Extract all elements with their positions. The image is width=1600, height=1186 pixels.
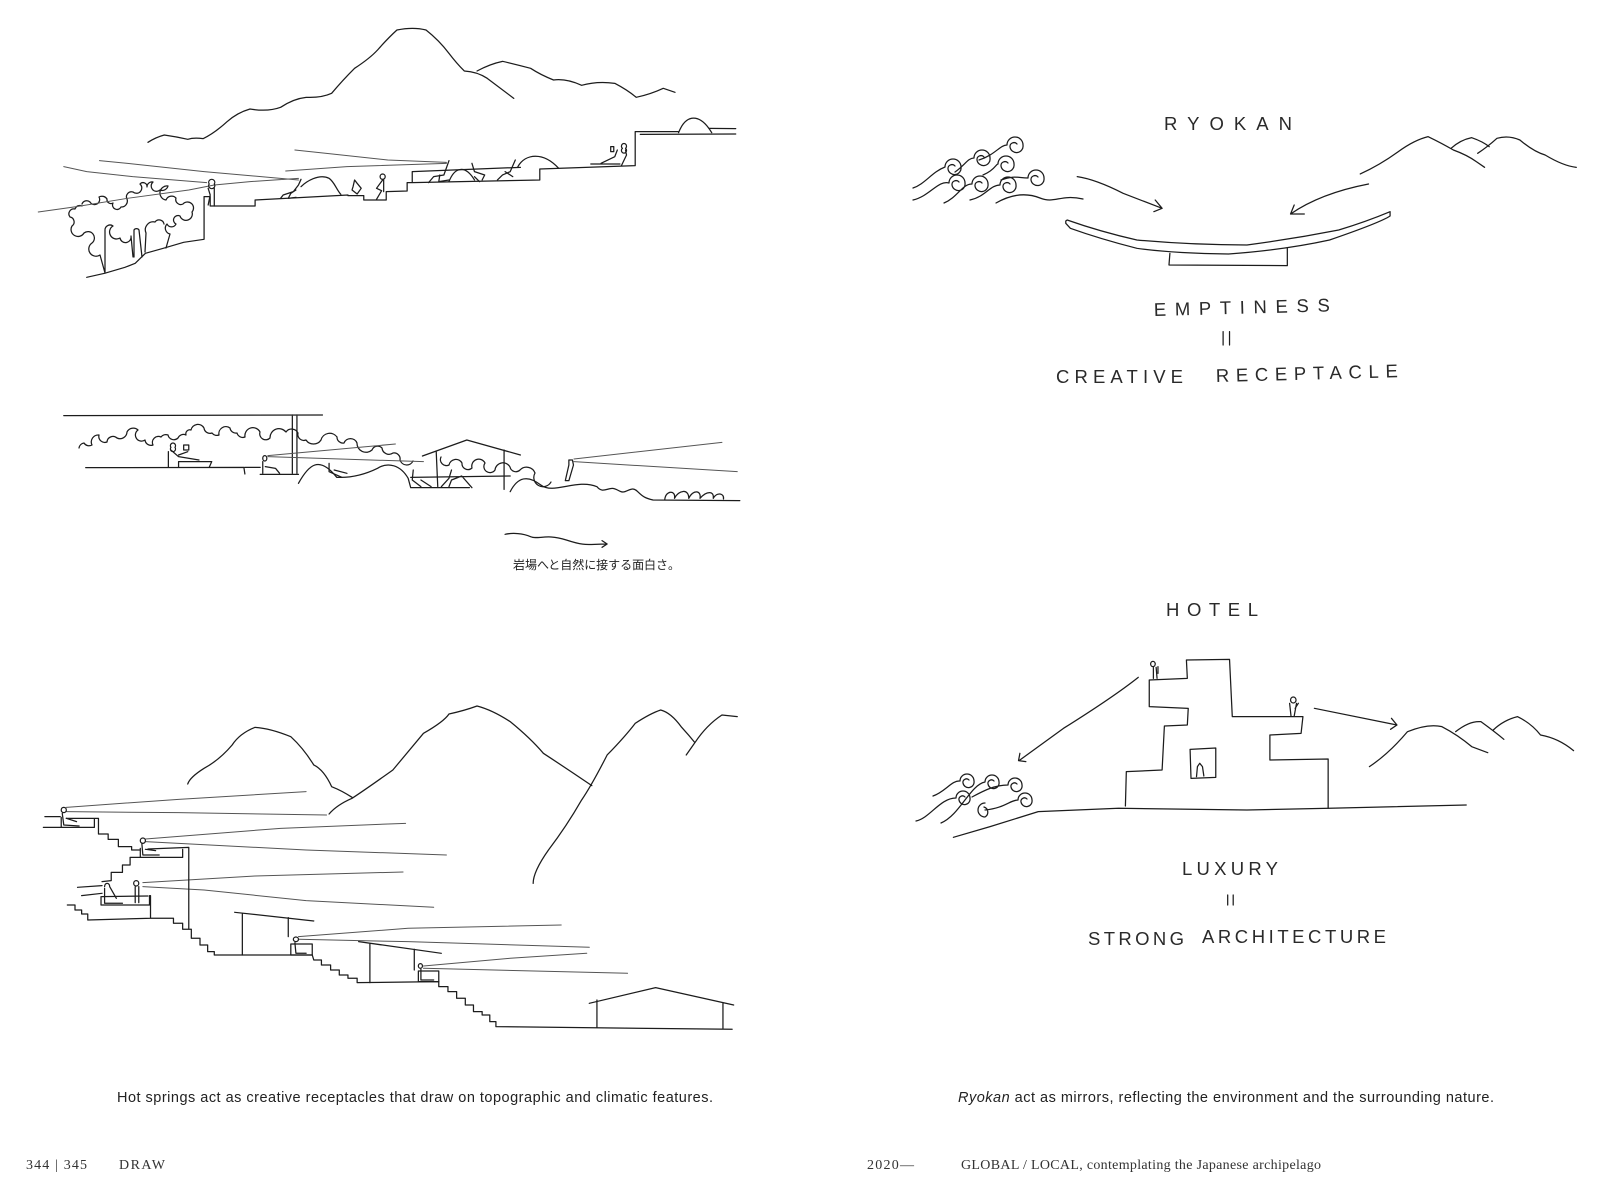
handwritten label: luxury: LUXURY — [1182, 858, 1278, 879]
stacked building outline — [1125, 659, 1328, 808]
bathers and reader figures — [168, 443, 573, 487]
viewing sight lines — [38, 150, 446, 212]
folio: page numbers: 344 | 345 — [26, 1158, 87, 1173]
window with figure — [1190, 748, 1216, 778]
arrow to sea — [1019, 677, 1138, 762]
arrow from mountains — [1291, 184, 1369, 214]
folio: year: 2020— — [867, 1158, 915, 1173]
sight lines — [66, 792, 628, 973]
drawing group in zoom units — [38, 28, 736, 277]
rooftop figures — [1151, 661, 1298, 716]
waves with spiral curls — [916, 774, 1032, 823]
equals sign — [1228, 895, 1233, 905]
waves with spiral curls — [913, 137, 1083, 203]
handwritten label: creative: CREATIVE — [1056, 366, 1183, 387]
mountains — [1360, 137, 1576, 174]
foliage squiggle — [79, 424, 551, 487]
handwritten label: hotel: HOTEL — [1166, 599, 1258, 620]
diagram: hotel sketch — [916, 659, 1574, 905]
handwritten annotation: 岩場へと自然に接する面白さ。 — [513, 557, 680, 572]
mountains — [188, 706, 737, 883]
main mountain outline — [148, 28, 514, 142]
diagram: ryokan sketch — [913, 137, 1576, 345]
bather figures — [61, 807, 434, 980]
drawing group in zoom units — [64, 415, 740, 547]
equals sign — [1223, 332, 1230, 345]
handwritten label: strong: STRONG — [1088, 928, 1184, 949]
terraced ground section — [87, 128, 736, 277]
small wave crests — [665, 491, 724, 499]
handwritten label: emptiness: EMPTINESS — [1154, 294, 1330, 320]
handwritten label: architecture: ARCHITECTURE — [1202, 926, 1386, 947]
rocks on terraces — [301, 118, 712, 194]
bathers and fire figures — [208, 144, 627, 206]
handwritten label: ryokan: RYOKAN — [1164, 113, 1292, 134]
canopy roof line and column — [64, 415, 322, 473]
tree canopy squiggles — [69, 182, 194, 273]
sketch: rocky shoreline baths — [64, 415, 740, 547]
mountains — [1369, 717, 1574, 767]
handwritten label: receptacle: RECEPTACLE — [1216, 360, 1398, 386]
curved roof bowl — [1066, 212, 1390, 254]
folio: section title: DRAW — [119, 1158, 166, 1173]
ground line — [953, 805, 1466, 837]
ground and rock section — [86, 465, 740, 501]
annotation arrow — [505, 533, 607, 547]
arrow from sea — [1077, 177, 1162, 212]
caption right: Ryokan act as mirrors, reflecting the environment and the surrounding nature. — [958, 1090, 1494, 1106]
stairs and pool sections — [43, 817, 732, 1029]
caption left: Hot springs act as creative receptacles that draw on topographic and climatic features. — [117, 1090, 713, 1106]
base — [1169, 248, 1287, 266]
sketch: stepped hillside with mountain views — [43, 706, 737, 1029]
secondary mountain ridge — [477, 61, 675, 97]
folio: chapter title: GLOBAL / LOCAL, contemplating the Japanese archipelago — [961, 1158, 1321, 1173]
arrow to mountains — [1314, 708, 1397, 729]
sight lines — [268, 442, 737, 472]
drawing group in zoom units — [1066, 137, 1576, 345]
sketch: hillside terraces with mountain view — [38, 28, 736, 277]
roofs and walls — [235, 912, 734, 1028]
pavilion roof and posts — [422, 440, 520, 489]
drawing group in zoom units — [953, 659, 1574, 905]
